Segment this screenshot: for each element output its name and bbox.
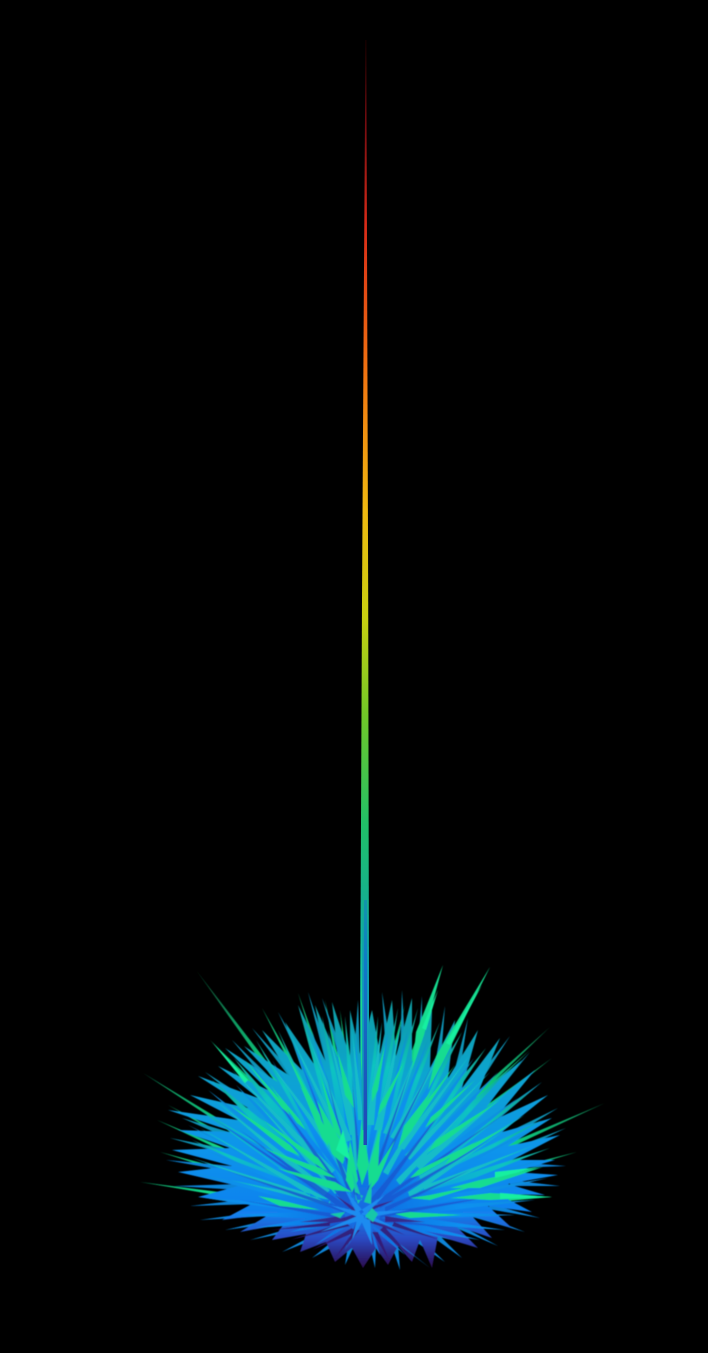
burst: sea-urchin spikes (140, 965, 605, 1270)
dark blue streaks (215, 1060, 510, 1230)
center green highlights (330, 1170, 378, 1222)
thin fringe spikes (170, 990, 566, 1156)
long thin outer spikes (140, 965, 605, 1220)
blue spoke fan (188, 1030, 548, 1268)
green shards (230, 965, 552, 1218)
center purple shadows (300, 1195, 425, 1250)
light teal thin spokes (192, 1020, 535, 1206)
jagged spike mass silhouette (168, 998, 560, 1268)
bright green accents (212, 985, 552, 1199)
wide teal spoke fan (192, 1008, 550, 1223)
center shards (320, 1190, 410, 1245)
lower stem overlapping the burst (360, 900, 369, 1145)
purple lower fringe (270, 1222, 440, 1262)
upper stem (360, 40, 369, 1130)
